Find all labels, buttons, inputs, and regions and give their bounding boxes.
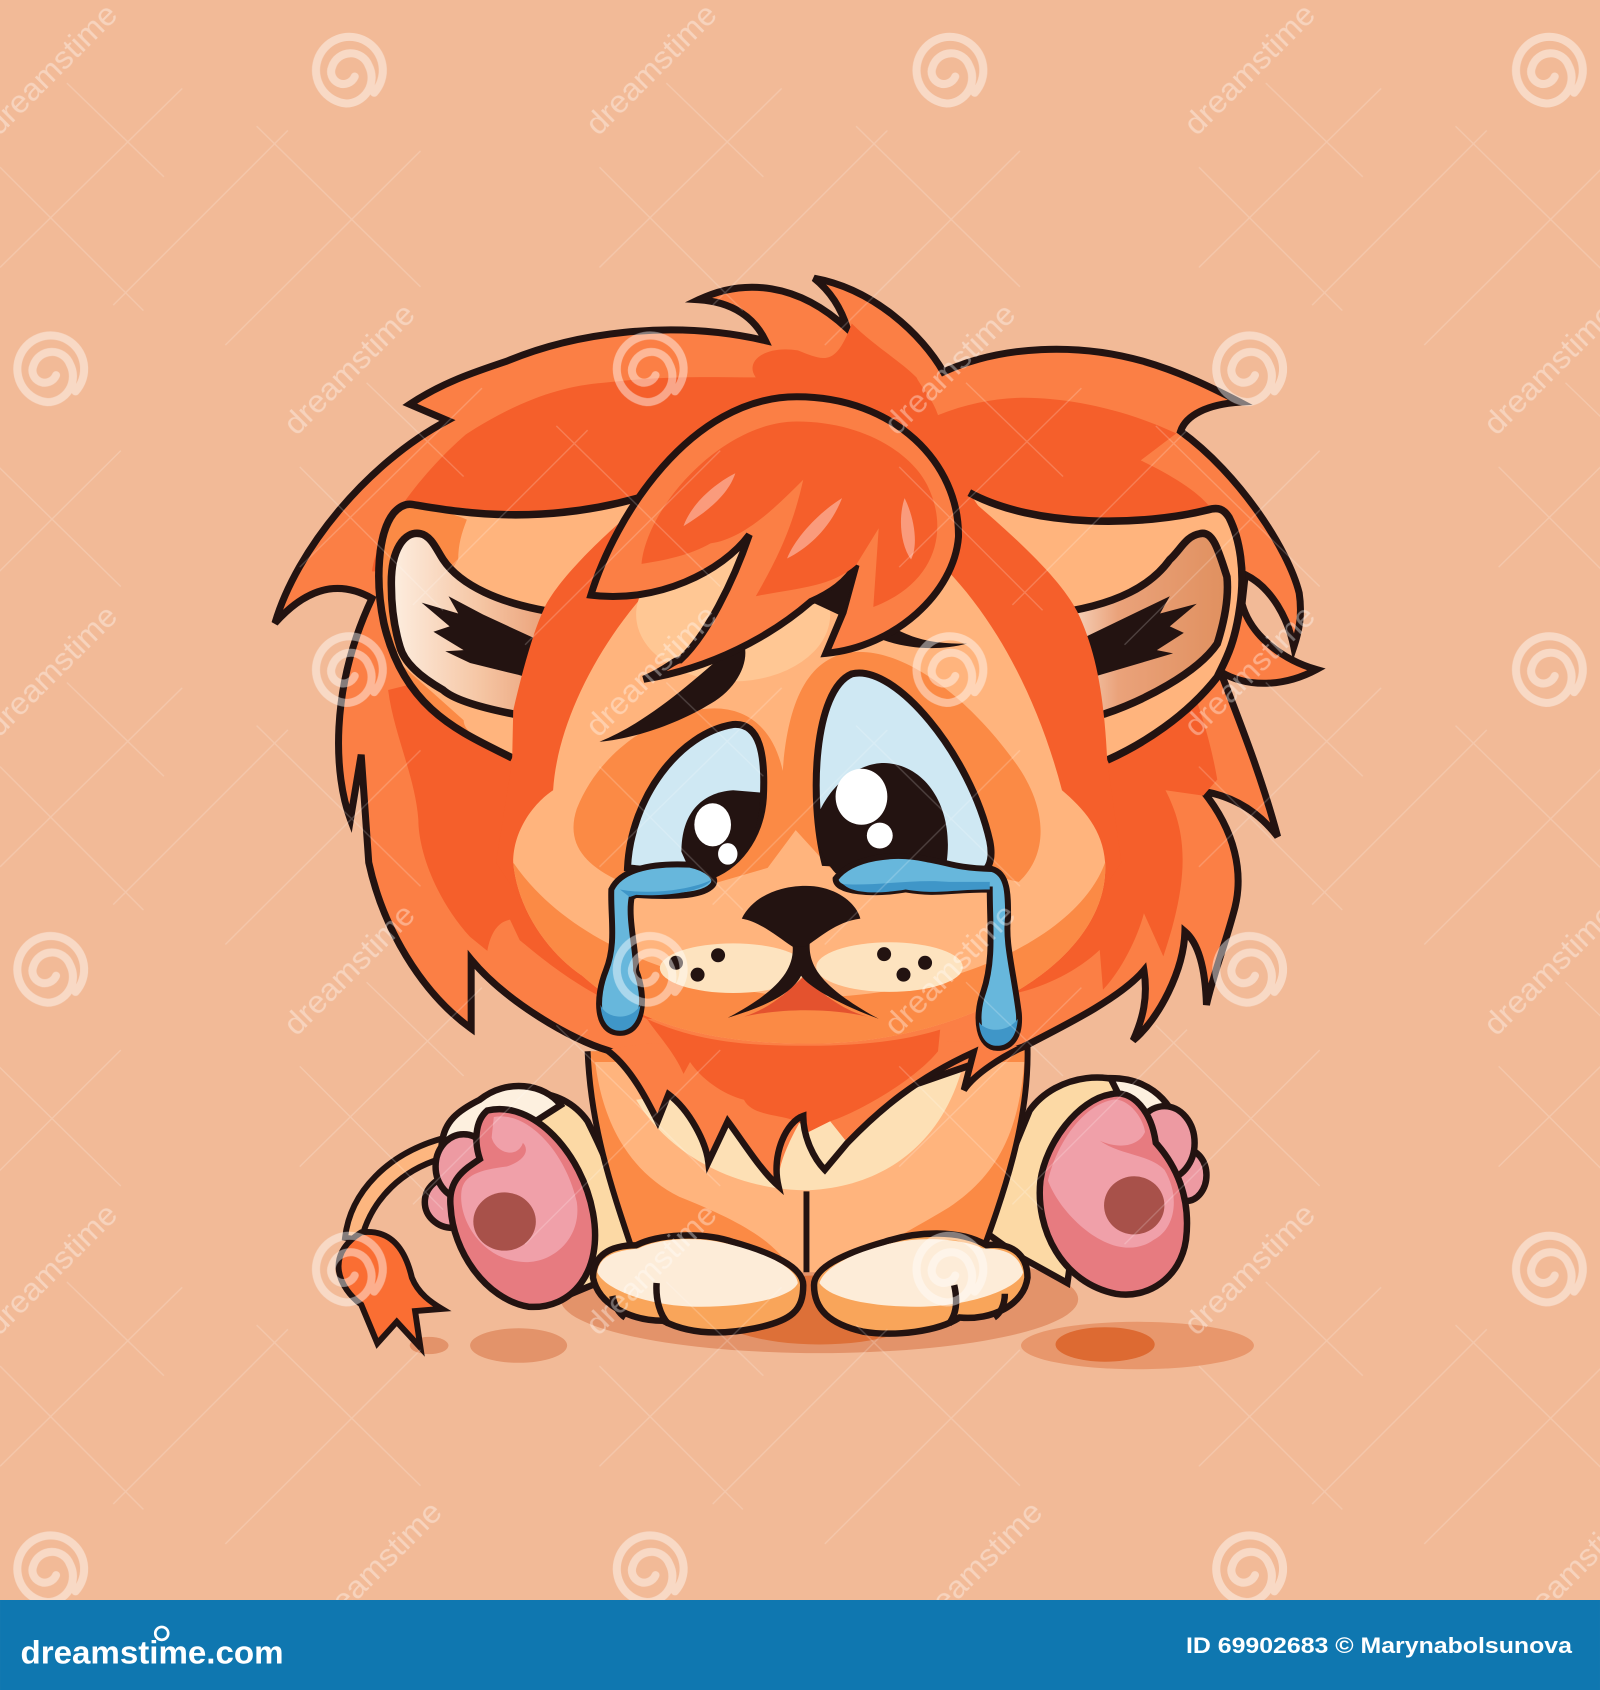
right ear <box>969 493 1242 760</box>
beard and chest fur <box>471 960 1023 1186</box>
watermark text: dreamstime <box>1177 1197 1322 1342</box>
watermark text: dreamstime <box>1177 598 1322 743</box>
watermark text: dreamstime <box>904 1494 1049 1639</box>
nose <box>742 886 860 947</box>
right tear <box>836 856 1019 1048</box>
watermark text: dreamstime <box>877 897 1022 1042</box>
watermark text: dreamstime <box>277 296 422 442</box>
left eyebrow <box>599 638 745 742</box>
front paws <box>593 1234 1027 1334</box>
tail <box>339 1139 442 1348</box>
face <box>496 498 1121 1044</box>
right eyebrow <box>879 625 967 648</box>
muzzle <box>660 942 963 993</box>
left eye <box>627 724 764 875</box>
right eye <box>816 673 991 873</box>
footer credit: ID 69902683 © Marynabolsunova <box>1186 1633 1572 1658</box>
watermark text: dreamstime <box>579 0 724 142</box>
watermark text: dreamstime <box>304 1494 449 1639</box>
watermark text: dreamstime <box>877 296 1022 442</box>
watermark text: dreamstime <box>579 1197 724 1342</box>
footer banner <box>0 1600 1600 1690</box>
forelock <box>591 397 959 679</box>
left tear <box>599 864 714 1033</box>
footer logo spiral <box>155 1627 168 1640</box>
body <box>588 1046 1028 1272</box>
watermark text: dreamstime <box>1177 0 1322 142</box>
watermark text: dreamstime <box>579 598 724 743</box>
ground shadows <box>410 1245 1254 1369</box>
mane <box>275 278 1316 1121</box>
left hind paw <box>425 1086 636 1307</box>
right hind paw <box>981 1077 1206 1295</box>
watermark text: dreamstime <box>277 897 422 1042</box>
mouth <box>728 943 879 1019</box>
footer logo text: dreamstime.com <box>20 1635 284 1671</box>
left ear <box>379 495 649 765</box>
